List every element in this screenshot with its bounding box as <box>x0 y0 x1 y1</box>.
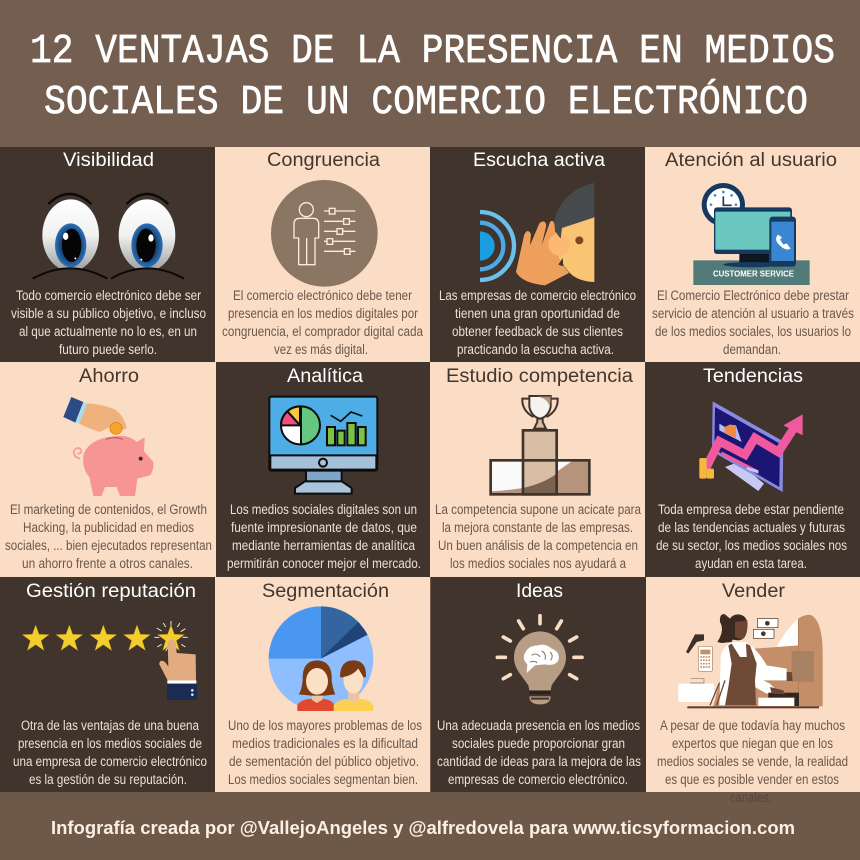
text block: Analítica <box>227 502 421 571</box>
title <box>30 29 835 126</box>
panel: Vender <box>646 577 860 805</box>
heading: Atención al usuario: Atención al usuario <box>665 150 837 171</box>
text block: Gestión reputación: una empresa de comercio electrónico <box>13 754 207 769</box>
text block: Congruencia: El comercio electrónico debe tener <box>233 288 412 303</box>
heading: Escucha activa: Escucha activa <box>473 150 605 171</box>
text block: Analítica: mediante herramientas de analítica <box>232 538 415 553</box>
text block: Visibilidad: visible a su público objetivo, e incluso <box>11 306 206 321</box>
text block: Escucha activa: tienen una gran oportunidad de <box>455 306 620 321</box>
text block: Ideas: sociales puede proporcionar gran <box>452 736 625 751</box>
icon: analytics monitor <box>269 397 377 494</box>
text block: Gestión reputación <box>13 718 207 787</box>
text block: Estudio competencia <box>435 502 641 571</box>
text block: Atención al usuario <box>652 288 854 357</box>
heading: Vender: Vender <box>722 581 786 602</box>
text block: Segmentación: Los medios sociales segmentan bien. <box>228 772 418 787</box>
icon: trend chart with rising arrow <box>699 401 803 492</box>
panel: Gestión reputación <box>0 577 215 792</box>
text block: Escucha activa: Las empresas de comercio electrónico <box>439 288 636 303</box>
text block: Ahorro <box>5 502 212 571</box>
heading: Visibilidad: Visibilidad <box>63 150 154 171</box>
text block: Estudio competencia: La competencia supone un acicate para <box>435 502 641 517</box>
panel: Visibilidad <box>0 147 215 362</box>
text block: Ideas <box>437 718 641 787</box>
text block: Atención al usuario: demandan. <box>723 342 781 357</box>
text block: Ahorro: Hacking, la publicidad en medios <box>23 520 194 535</box>
icon: shop vendor at counter <box>678 614 823 708</box>
text block: Vender: canales. <box>730 790 772 805</box>
text block: Estudio competencia: los medios sociales nos ayudará a <box>450 556 626 571</box>
text block: Estudio competencia: Un buen análisis de la competencia en <box>438 538 638 553</box>
footer credit: Infografía creada por @VallejoAngeles y @alfredovela para www.ticsyformacion.com <box>51 818 795 838</box>
text block: Analítica: permitirán conocer mejor el mercado. <box>227 556 421 571</box>
icon: customer service devices: CUSTOMER SERVICE <box>713 270 795 279</box>
text block: Escucha activa: practicando la escucha activa. <box>457 342 614 357</box>
icon: listening head <box>480 183 594 286</box>
text block: Analítica: fuente impresionante de datos, que <box>231 520 417 535</box>
icon: cartoon eyes <box>33 194 184 288</box>
text block: Gestión reputación: Otra de las ventajas de una buena <box>21 718 199 733</box>
text block: Visibilidad: al que actualmente no lo es, en un <box>19 324 197 339</box>
text block: Ahorro: El marketing de contenidos, el Growth <box>10 502 207 517</box>
icon: piggy bank with coin <box>63 397 153 496</box>
text block: Escucha activa: obtener feedback de sus clientes <box>452 324 623 339</box>
icon: podium with trophy <box>491 396 589 494</box>
panel: Segmentación <box>215 577 430 792</box>
heading: Segmentación: Segmentación <box>262 581 389 602</box>
heading: Analítica: Analítica <box>287 366 363 387</box>
icon: light bulb with brain <box>497 616 582 704</box>
icon: customer service devices <box>693 183 810 285</box>
panel: Escucha activa <box>430 147 645 362</box>
text block: Segmentación <box>228 718 422 787</box>
heading: Tendencias: Tendencias <box>703 366 803 387</box>
panel: Atención al usuario <box>645 147 860 362</box>
text block: Congruencia: congruencia, el comprador digital cada <box>222 324 423 339</box>
text block: Visibilidad: futuro puede serlo. <box>59 342 157 357</box>
text block: Gestión reputación: presencia en los medios sociales de <box>18 736 202 751</box>
text block: Segmentación: de sementación del público objetivo. <box>229 754 419 769</box>
panel: Congruencia <box>215 147 430 362</box>
text block: Visibilidad <box>11 288 206 357</box>
text block: Ahorro: un ahorro frente a otros canales. <box>22 556 193 571</box>
panel: Tendencias <box>645 362 860 577</box>
heading: Congruencia: Congruencia <box>267 150 380 171</box>
panel: Estudio competencia <box>430 362 645 577</box>
heading: Estudio competencia: Estudio competencia <box>446 366 633 387</box>
text block: Escucha activa <box>439 288 636 357</box>
footer band <box>0 792 860 860</box>
text block: Congruencia <box>222 288 423 357</box>
text block: Ideas: cantidad de ideas para la mejora de las <box>437 754 641 769</box>
text block: Gestión reputación: es la gestión de su reputación. <box>29 772 187 787</box>
text block: Ahorro: sociales, ... bien ejecutados representan <box>5 538 212 553</box>
text block: Tendencias <box>656 502 847 571</box>
heading: Gestión reputación: Gestión reputación <box>26 581 196 602</box>
icon: five stars and pointing hand <box>22 621 197 700</box>
text block: Tendencias: ayudan en esta tarea. <box>695 556 807 571</box>
panel: Ideas <box>431 577 646 792</box>
panel: Ahorro <box>0 362 216 577</box>
text block: Estudio competencia: la mejora constante de las empresas. <box>442 520 633 535</box>
text block: Visibilidad: Todo comercio electrónico debe ser <box>16 288 201 303</box>
panel: Analítica <box>216 362 430 577</box>
heading: Ideas: Ideas <box>516 581 563 602</box>
text block: Analítica: Los medios sociales digitales son un <box>230 502 417 517</box>
text block: Vender <box>657 718 848 805</box>
text block: Ideas: Una adecuada presencia en los medios <box>437 718 640 733</box>
text block: Ideas: empresas de comercio electrónico. <box>448 772 628 787</box>
text block: Segmentación: Uno de los mayores problemas de los <box>228 718 422 733</box>
header band <box>0 0 860 147</box>
icon: person with sliders <box>271 180 378 287</box>
text block: Segmentación: medios tradicionales es la dificultad <box>232 736 418 751</box>
heading: Ahorro: Ahorro <box>79 366 139 387</box>
icon: pie chart with two people <box>267 605 377 712</box>
text block: Vender: expertos que niegan que en los <box>672 736 833 751</box>
text block: Congruencia: vez es más digital. <box>274 342 368 357</box>
text block: Congruencia: presencia en los medios digitales por <box>228 306 418 321</box>
